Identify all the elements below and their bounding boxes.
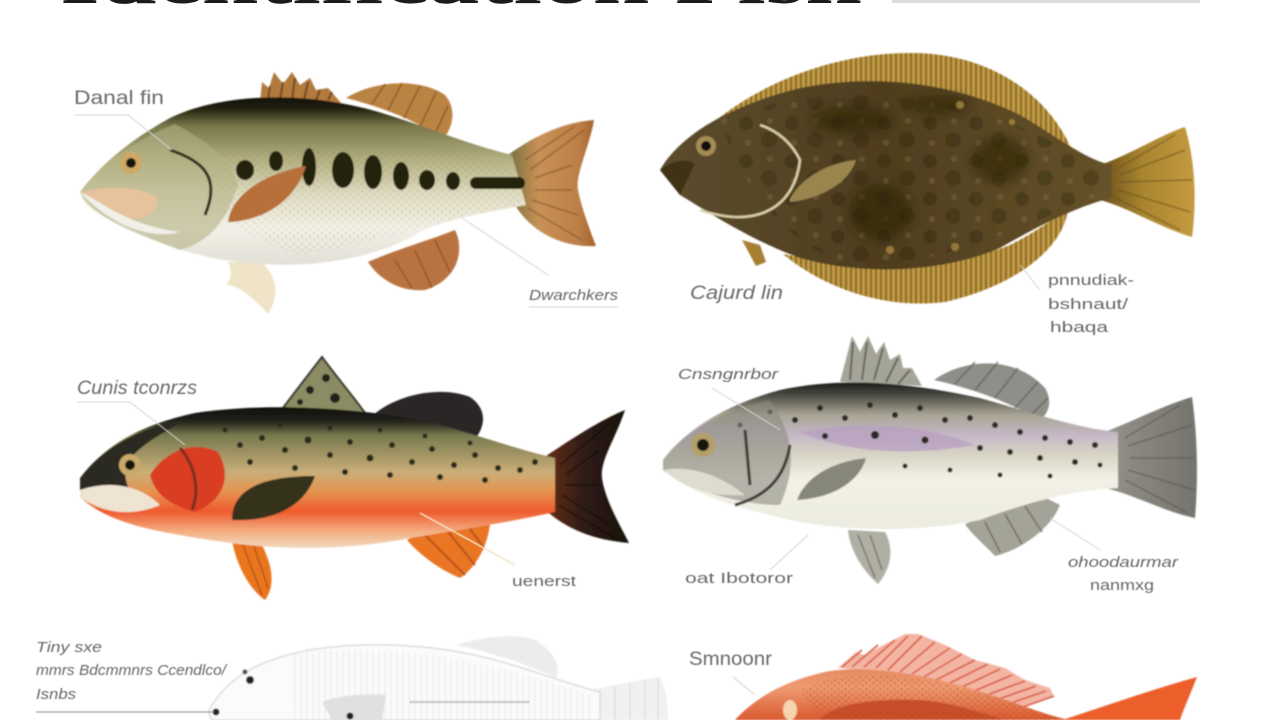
- label: line fish text: Tiny sxe: [36, 639, 102, 656]
- label: rainbow right: [1050, 518, 1179, 594]
- rainbow pectoral fin: [797, 458, 866, 500]
- rainbow spiny dorsal: [840, 336, 922, 386]
- label: trout top: Cunis tconrzs: [77, 378, 198, 399]
- line fish pectoral fin: [322, 694, 386, 720]
- bass lower fins: [368, 230, 459, 290]
- bass soft dorsal fin: [346, 83, 452, 140]
- trout eye: [119, 454, 141, 476]
- bass head: [80, 124, 238, 250]
- snapper dorsal fin: [838, 634, 1054, 708]
- bass pectoral fin: [228, 166, 306, 222]
- label: line fish text: mmrs Bdcmmnrs Ccendlco/: [36, 662, 228, 679]
- snapper head highlight: [783, 700, 797, 720]
- bass tail: [508, 120, 596, 246]
- flounder gill line: [700, 125, 800, 217]
- label: bass callout: [462, 218, 619, 307]
- label: caudal fin: Cajurd lin: [690, 283, 783, 304]
- fish: largemouth bass: [80, 72, 596, 314]
- flounder belly fin: [742, 240, 766, 266]
- label: rainbow top: [678, 366, 780, 430]
- line fish tail: [590, 677, 668, 720]
- bass body: [80, 97, 526, 265]
- trout spots: [222, 422, 538, 483]
- bass markings: [236, 148, 525, 190]
- snapper tail: [1062, 677, 1197, 720]
- trout body: [80, 407, 555, 548]
- rainbow eye: [691, 433, 715, 457]
- label: snapper: Smnoonr: [689, 649, 773, 670]
- rainbow tail: [1105, 397, 1197, 518]
- label: dorsal fin: Danal fin: [74, 88, 164, 109]
- label: rainbow bottom: [685, 535, 808, 587]
- trout lower fins: [407, 513, 490, 578]
- label: snapper: [689, 649, 773, 695]
- label: flounder callout: [1020, 265, 1134, 336]
- fish: rainbow trout: [663, 336, 1197, 584]
- label: flounder callout: pnnudiak-: [1048, 272, 1134, 289]
- flounder body: [660, 81, 1112, 269]
- label: bass callout: Dwarchkers: [529, 287, 619, 304]
- fish: brook trout: [80, 357, 629, 600]
- flounder pectoral fin: [790, 160, 856, 202]
- bass dorsal spiny fin: [260, 72, 342, 104]
- fish: flounder: [660, 53, 1195, 304]
- rainbow soft dorsal: [934, 363, 1049, 420]
- line fish nostril: [242, 670, 248, 674]
- flounder edge spots: [886, 101, 1015, 254]
- label: rainbow bottom: oat Ibotoror: [685, 570, 793, 587]
- flounder bottom fin fringe: [783, 208, 1068, 304]
- trout adipose fin: [372, 392, 483, 443]
- label: rainbow right: nanmxg: [1090, 577, 1154, 594]
- flounder dark patches: [810, 95, 1028, 240]
- label: trout bottom: uenerst: [512, 573, 577, 590]
- label: rainbow right: ohoodaurmar: [1068, 554, 1179, 571]
- label: line fish text: Isnbs: [36, 686, 77, 703]
- rainbow lateral stripe: [800, 426, 975, 451]
- line fish dorsal fin: [455, 636, 558, 678]
- flounder top fin fringe: [702, 53, 1071, 150]
- rainbow lower fins: [965, 495, 1060, 556]
- fish: red snapper: [735, 634, 1197, 720]
- title rule: [892, 0, 1200, 3]
- rainbow spots: [738, 402, 1102, 478]
- fish: line drawing: [208, 636, 668, 720]
- line fish pointer dots: [212, 708, 220, 716]
- label: trout bottom: [420, 513, 577, 590]
- label: line fish text: [36, 639, 228, 712]
- rainbow head: [663, 400, 791, 505]
- flounder eye: [696, 136, 716, 156]
- label: flounder callout: hbaqa: [1050, 319, 1109, 336]
- trout red gill: [150, 447, 225, 512]
- trout tail: [540, 410, 629, 543]
- snapper flank: [820, 700, 1005, 720]
- label: dorsal fin: [74, 88, 172, 150]
- label: trout top: [77, 378, 198, 445]
- flounder tail: [1100, 127, 1195, 237]
- trout head: [80, 420, 185, 505]
- rainbow body: [663, 382, 1118, 529]
- bass eye: [120, 152, 142, 174]
- line fish lateral line: [410, 701, 530, 703]
- line fish eye: [246, 676, 254, 684]
- line fish body: [208, 645, 600, 720]
- label: flounder callout: bshnaut/: [1048, 296, 1129, 313]
- label: rainbow top: Cnsngnrbor: [678, 366, 779, 383]
- trout pectoral fin: [232, 476, 315, 520]
- trout dorsal fin: [283, 357, 365, 413]
- flounder mouth: [660, 161, 695, 195]
- snapper body: [735, 669, 1070, 720]
